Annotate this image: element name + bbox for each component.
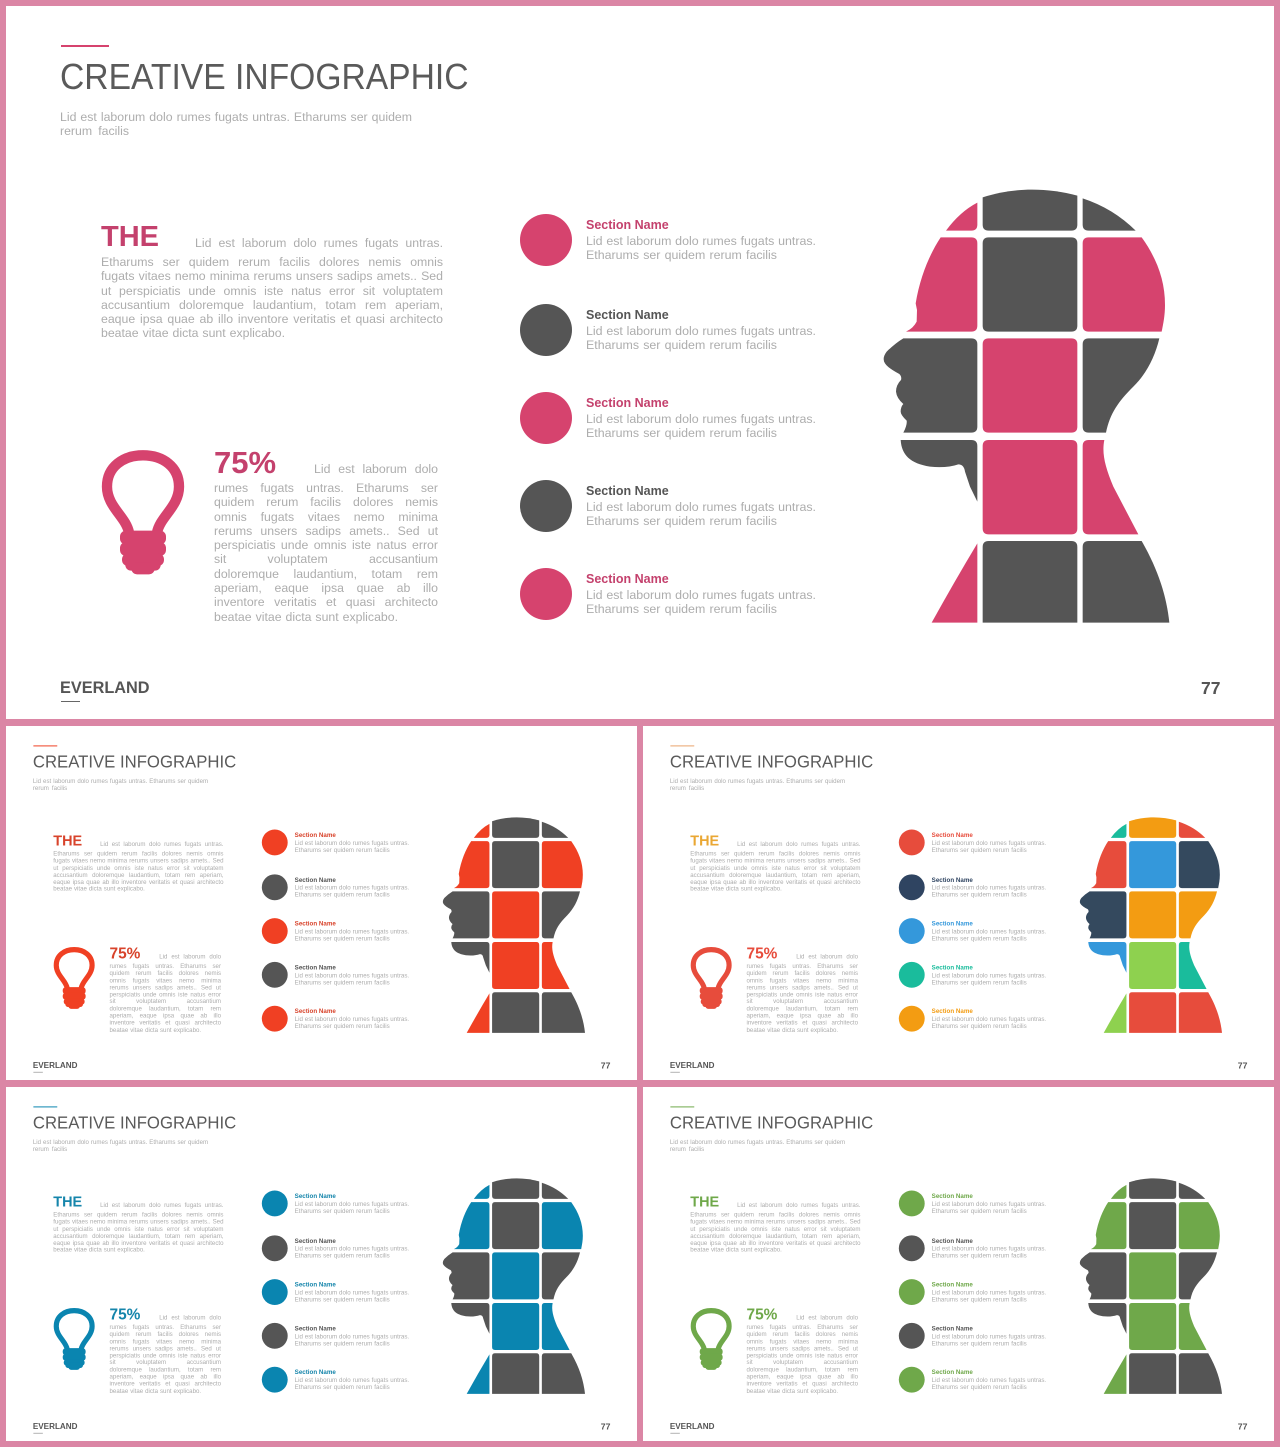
section item 4 [898,962,1046,988]
accent line [61,45,109,47]
text block: 75% paragraph: Lid est laborum dolo [796,1314,858,1321]
section item 5: Etharums ser quidem rerum facilis [295,1384,390,1391]
text block: THE paragraph [690,840,860,892]
section item 3: Lid est laborum dolo rumes fugats untras. [295,928,409,935]
text block: THE paragraph: Etharums ser quidem rerum facilis dolores nemis omnis [690,850,860,857]
section item 2: Lid est laborum dolo rumes fugats untras. [932,884,1046,891]
title: CREATIVE INFOGRAPHIC [33,1112,236,1132]
heading: THE: THE [690,833,719,849]
text block: THE paragraph: Etharums ser quidem rerum facilis dolores nemis omnis [53,1211,223,1218]
text block: THE paragraph: ut perspiciatis unde omnis iste natus error sit voluptatem [690,864,860,871]
footer brand: EVERLAND [670,1422,714,1431]
section item 3 [898,918,1046,944]
text block: 75% paragraph: rumes fugats untras. Etharums ser [214,481,438,495]
text block: 75% paragraph: beatae vitae dicta sunt explicabo. [747,1026,838,1033]
title: CREATIVE INFOGRAPHIC [33,751,236,771]
section item 1: Section Name [295,1193,336,1199]
section item 3: Section Name [295,920,336,927]
icon: light bulb [54,1308,95,1370]
text block: 75% paragraph: sit voluptatem accusantium [110,998,221,1005]
text block: THE paragraph: Lid est laborum dolo rumes fugats untras. [100,1201,223,1208]
text block: THE paragraph: Etharums ser quidem rerum facilis dolores nemis omnis [690,1211,860,1218]
section item 5: Lid est laborum dolo rumes fugats untras. [295,1377,409,1384]
text block: THE paragraph: eaque ipsa quae ab illo inventore veritatis et quasi architecto [690,1239,860,1246]
text block: 75% paragraph: beatae vitae dicta sunt explicabo. [214,610,398,624]
section item 5 [262,1006,409,1032]
section item 1: Etharums ser quidem rerum facilis [932,1207,1027,1214]
section item 3 [262,1279,409,1305]
text block: 75% paragraph: Lid est laborum dolo [159,1314,221,1321]
text block: 75% paragraph: quidem rerum facilis dolores nemis [747,970,858,976]
heading: THE: THE [690,1194,719,1210]
section item 4: Etharums ser quidem rerum facilis [932,1340,1027,1347]
text block: THE paragraph: fugats vitaes nemo minima rerums unsers sadips amets.. Sed [690,1218,860,1225]
section item 1 [898,830,1046,856]
subtitle [670,1139,845,1153]
text block: 75% paragraph: perspiciatis unde omnis iste natus error [214,538,438,552]
section item 4: Lid est laborum dolo rumes fugats untras. [586,500,816,514]
accent line [670,1105,694,1108]
section item 3: Section Name [295,1281,336,1288]
text block: 75% paragraph: rerums unsers sadips amets.. Sed ut [214,524,438,538]
section item 4: Etharums ser quidem rerum facilis [932,979,1027,986]
section item 2: Section Name [295,1237,336,1244]
text block: THE paragraph: Lid est laborum dolo rumes fugats untras. [100,840,223,847]
text block: THE paragraph: ut perspiciatis unde omnis iste natus error sit voluptatem [690,1225,860,1232]
section item 5: Lid est laborum dolo rumes fugats untras. [586,588,816,602]
text block: 75% paragraph: rerums unsers sadips amets.. Sed ut [747,984,858,991]
text block: 75% paragraph: aperiam, eaque ipsa quae ab illo [110,1373,221,1380]
section item 5: Etharums ser quidem rerum facilis [586,602,777,616]
section item 5: Etharums ser quidem rerum facilis [295,1023,390,1030]
text block: 75% paragraph: omnis fugats vitaes nemo minima [747,977,858,984]
heading: 75%: 75% [110,944,140,962]
section item 4: Etharums ser quidem rerum facilis [586,514,777,528]
section item 2: Lid est laborum dolo rumes fugats untras. [295,1245,409,1252]
text block: 75% paragraph: rumes fugats untras. Etharums ser [110,962,221,969]
panel: red slide [6,726,637,1080]
icon: light bulb [690,947,732,1009]
section item 3: Etharums ser quidem rerum facilis [932,935,1027,942]
section item 5: Section Name [295,1008,336,1015]
text block: 75% paragraph: Lid est laborum dolo [159,953,221,960]
section item 2: Lid est laborum dolo rumes fugats untras. [295,884,409,891]
section item 4 [262,1323,421,1355]
head silhouette made of tiles [1073,1174,1227,1398]
section item 2: Etharums ser quidem rerum facilis [295,891,390,898]
icon: light bulb [54,947,95,1009]
text block: 75% paragraph: Lid est laborum dolo [796,953,858,960]
section item 1: Lid est laborum dolo rumes fugats untras. [295,1200,409,1207]
section item 1: Etharums ser quidem rerum facilis [295,846,390,853]
section item 5: Section Name [932,1369,973,1376]
text block: 75% paragraph [110,953,221,1034]
text block: THE paragraph: Etharums ser quidem rerum facilis dolores nemis omnis [53,850,223,857]
text block: THE paragraph [53,1201,224,1253]
text block: 75% paragraph: quidem rerum facilis dolores nemis [110,970,221,976]
text block: 75% paragraph: inventore veritatis et quasi architecto [214,595,438,609]
text block: 75% paragraph: quidem rerum facilis dolores nemis [110,1331,221,1337]
heading: 75%: 75% [747,944,777,962]
section item 3: Section Name [932,1281,973,1288]
text block: 75% paragraph: perspiciatis unde omnis iste natus error [747,1352,858,1359]
text block: 75% paragraph: rumes fugats untras. Etharums ser [747,962,858,969]
text block: 75% paragraph: perspiciatis unde omnis iste natus error [110,991,221,998]
text block: 75% paragraph [214,462,438,624]
page number: 77 [601,1060,610,1070]
panel: green slide [643,1087,1274,1441]
text block: 75% paragraph: sit voluptatem accusantium [747,1359,858,1366]
text block: THE paragraph: fugats vitaes nemo minima rerums unsers sadips amets.. Sed [53,857,223,864]
section item 3: Section Name [932,920,973,927]
panel: blue slide [6,1087,637,1441]
subtitle [670,778,845,792]
text block: 75% paragraph: beatae vitae dicta sunt explicabo. [110,1387,201,1394]
text block: THE paragraph [101,236,443,340]
subtitle: rerum facilis [33,785,67,792]
footer brand: EVERLAND [60,679,150,697]
text block: 75% paragraph: beatae vitae dicta sunt explicabo. [110,1026,201,1033]
subtitle: rerum facilis [33,1146,67,1153]
section item 4: Etharums ser quidem rerum facilis [295,979,390,986]
text block: 75% paragraph: doloremque laudantium, totam rem [747,1005,858,1012]
subtitle: Lid est laborum dolo rumes fugats untras. Etharums ser quidem [670,778,845,785]
text block: 75% paragraph [110,1314,221,1394]
section item 4: Lid est laborum dolo rumes fugats untras. [932,972,1046,979]
heading: 75%: 75% [747,1305,777,1323]
text block: THE paragraph: fugats vitaes nemo minima rerums unsers sadips amets.. Sed [53,1218,223,1225]
text block: 75% paragraph: rerums unsers sadips amets.. Sed ut [110,1345,221,1352]
text block: 75% paragraph: Lid est laborum dolo [314,462,438,476]
text block: THE paragraph: eaque ipsa quae ab illo inventore veritatis et quasi architecto [101,312,443,326]
subtitle: Lid est laborum dolo rumes fugats untras. Etharums ser quidem [33,1139,208,1146]
section item 5: Lid est laborum dolo rumes fugats untras. [295,1016,409,1023]
section item 1 [520,214,816,266]
section item 2: Lid est laborum dolo rumes fugats untras. [586,324,816,338]
panel: main pink slide [6,6,1274,719]
text block: 75% paragraph: doloremque laudantium, totam rem [110,1366,221,1373]
section item 1 [899,1191,1058,1222]
section item 4: Section Name [295,964,336,971]
section item 1: Etharums ser quidem rerum facilis [586,248,777,262]
heading: THE: THE [53,833,82,849]
section item 2: Section Name [932,876,973,883]
head silhouette made of multicoloured tiles [1080,817,1222,1033]
section item 4: Section Name [586,484,669,498]
section item 4: Lid est laborum dolo rumes fugats untras. [932,1333,1046,1340]
section item 5: Etharums ser quidem rerum facilis [932,1384,1027,1391]
text block: 75% paragraph: perspiciatis unde omnis iste natus error [110,1352,221,1359]
text block: 75% paragraph: rerums unsers sadips amets.. Sed ut [110,984,221,991]
text block: THE paragraph: fugats vitaes nemo minima rerums unsers sadips amets.. Sed [101,269,443,283]
section item 4: Etharums ser quidem rerum facilis [295,1340,390,1347]
section item 3: Etharums ser quidem rerum facilis [932,1296,1027,1303]
text block: 75% paragraph: inventore veritatis et quasi architecto [747,1380,858,1387]
text block: 75% paragraph: inventore veritatis et quasi architecto [110,1380,221,1387]
text block: THE paragraph: accusantium doloremque laudantium, totam rem aperiam, [690,1232,860,1239]
section item 5: Section Name [932,1008,973,1015]
section item 1 [262,1190,409,1216]
section item 3 [520,392,816,444]
text block: 75% paragraph: sit voluptatem accusantium [747,998,858,1005]
section item 3: Section Name [586,396,669,410]
section item 5 [262,1367,421,1399]
text block: THE paragraph: Etharums ser quidem rerum facilis dolores nemis omnis [101,255,443,269]
section item 2: Etharums ser quidem rerum facilis [932,891,1027,898]
text block: THE paragraph: beatae vitae dicta sunt explicabo. [53,885,145,892]
section item 1: Etharums ser quidem rerum facilis [932,846,1027,853]
text block: THE paragraph: accusantium doloremque laudantium, totam rem aperiam, [101,298,443,312]
head silhouette made of tiles [884,190,1170,623]
heading: 75%: 75% [110,1305,140,1323]
text block: THE paragraph: beatae vitae dicta sunt explicabo. [690,1246,782,1253]
text block: 75% paragraph: rumes fugats untras. Etharums ser [747,1323,858,1330]
section item 2: Lid est laborum dolo rumes fugats untras. [932,1245,1046,1252]
section item 2: Etharums ser quidem rerum facilis [932,1252,1027,1259]
section item 5 [899,1367,1058,1399]
section item 5: Section Name [586,572,669,586]
section item 1: Section Name [932,1193,973,1199]
text block: 75% paragraph: rerums unsers sadips amets.. Sed ut [747,1345,858,1352]
section item 5 [520,568,816,620]
subtitle: Lid est laborum dolo rumes fugats untras. Etharums ser quidem [60,110,412,124]
section item 1: Section Name [295,832,336,838]
section item 3 [899,1279,1058,1311]
text block: THE paragraph: fugats vitaes nemo minima rerums unsers sadips amets.. Sed [690,857,860,864]
section item 5: Lid est laborum dolo rumes fugats untras. [932,1016,1046,1023]
text block: 75% paragraph: sit voluptatem accusantium [214,552,438,566]
section item 1: Section Name [586,218,669,232]
section item 5: Lid est laborum dolo rumes fugats untras. [932,1377,1046,1384]
text block: 75% paragraph: aperiam, eaque ipsa quae ab illo [747,1012,858,1019]
section item 4 [520,480,816,532]
icon: light bulb [685,1308,735,1378]
section item 4: Lid est laborum dolo rumes fugats untras. [295,972,409,979]
section item 2: Etharums ser quidem rerum facilis [295,1252,390,1259]
section item 2 [899,1235,1058,1267]
title: CREATIVE INFOGRAPHIC [60,56,469,97]
text block: THE paragraph: Lid est laborum dolo rumes fugats untras. [737,1201,860,1208]
section item 4 [262,962,409,988]
subtitle [33,778,208,792]
section item 4: Section Name [932,1325,973,1332]
text block: THE paragraph [690,1201,860,1254]
text block: 75% paragraph: rumes fugats untras. Etharums ser [110,1323,221,1330]
subtitle [33,1139,208,1153]
section item 2 [898,874,1046,900]
text block: 75% paragraph: omnis fugats vitaes nemo minima [214,510,438,524]
text block: 75% paragraph: inventore veritatis et quasi architecto [110,1019,221,1026]
section item 5 [898,1006,1046,1032]
section item 5: Section Name [295,1369,336,1376]
section item 3: Lid est laborum dolo rumes fugats untras. [932,928,1046,935]
text block: 75% paragraph: perspiciatis unde omnis iste natus error [747,991,858,998]
text block: THE paragraph [53,840,224,892]
title: CREATIVE INFOGRAPHIC [670,1112,873,1132]
subtitle: rerum facilis [60,124,129,138]
heading: THE: THE [101,221,159,253]
subtitle: Lid est laborum dolo rumes fugats untras. Etharums ser quidem [670,1139,845,1146]
text block: THE paragraph: eaque ipsa quae ab illo inventore veritatis et quasi architecto [53,1239,223,1246]
title: CREATIVE INFOGRAPHIC [670,751,873,771]
head silhouette made of tiles [442,817,585,1033]
section item 2: Section Name [295,876,336,883]
section item 3: Lid est laborum dolo rumes fugats untras. [586,412,816,426]
section item 5: Etharums ser quidem rerum facilis [932,1023,1027,1030]
section item 1: Section Name [932,832,973,838]
section item 4: Lid est laborum dolo rumes fugats untras. [295,1333,409,1340]
text block: THE paragraph: beatae vitae dicta sunt explicabo. [690,885,782,892]
head silhouette made of tiles [436,1174,590,1398]
text block: 75% paragraph: aperiam, eaque ipsa quae ab illo [747,1373,858,1380]
section item 4 [899,1323,1058,1355]
text block: THE paragraph: eaque ipsa quae ab illo inventore veritatis et quasi architecto [690,878,860,885]
section item 1: Lid est laborum dolo rumes fugats untras. [295,839,409,846]
text block: THE paragraph: accusantium doloremque laudantium, totam rem aperiam, [690,871,860,878]
section item 3: Etharums ser quidem rerum facilis [295,935,390,942]
section item 3: Etharums ser quidem rerum facilis [586,426,777,440]
section item 2 [520,304,816,356]
section item 2: Section Name [932,1237,973,1244]
section item 1: Lid est laborum dolo rumes fugats untras. [932,1200,1046,1207]
text block: THE paragraph: eaque ipsa quae ab illo inventore veritatis et quasi architecto [53,878,223,885]
page number: 77 [1238,1060,1247,1070]
section item 3 [262,918,409,944]
footer brand: EVERLAND [33,1422,77,1431]
section item 2: Etharums ser quidem rerum facilis [586,338,777,352]
accent line [33,744,57,747]
accent line [33,1105,57,1108]
panel: multicolour slide [643,726,1274,1080]
subtitle: rerum facilis [670,785,704,792]
text block: 75% paragraph: aperiam, eaque ipsa quae ab illo [110,1012,221,1019]
section item 4: Section Name [932,964,973,971]
text block: 75% paragraph: omnis fugats vitaes nemo minima [747,1338,858,1345]
section item 2 [262,874,409,900]
page number: 77 [1201,678,1220,698]
text block: 75% paragraph: doloremque laudantium, totam rem [747,1366,858,1373]
section item 1: Lid est laborum dolo rumes fugats untras. [932,839,1046,846]
section item 3: Etharums ser quidem rerum facilis [295,1296,390,1303]
text block: 75% paragraph: omnis fugats vitaes nemo minima [110,977,221,984]
text block: THE paragraph: Lid est laborum dolo rumes fugats untras. [195,236,443,250]
text block: THE paragraph: beatae vitae dicta sunt explicabo. [101,326,285,340]
text block: 75% paragraph [746,953,858,1034]
page number: 77 [601,1421,610,1431]
text block: 75% paragraph: beatae vitae dicta sunt explicabo. [747,1387,838,1394]
heading: 75%: 75% [214,445,276,480]
section item 2: Section Name [586,308,669,322]
text block: THE paragraph: ut perspiciatis unde omnis iste natus error sit voluptatem [53,1225,223,1232]
text block: 75% paragraph: doloremque laudantium, totam rem [214,567,438,581]
subtitle: Lid est laborum dolo rumes fugats untras. Etharums ser quidem [33,778,208,785]
section item 3: Lid est laborum dolo rumes fugats untras. [932,1289,1046,1296]
section item 2 [262,1235,409,1262]
page number: 77 [1238,1421,1247,1431]
icon: light bulb [102,450,184,574]
text block: 75% paragraph: sit voluptatem accusantium [110,1359,221,1366]
text block: THE paragraph: Lid est laborum dolo rumes fugats untras. [737,840,860,847]
text block: 75% paragraph: doloremque laudantium, totam rem [110,1005,221,1012]
subtitle: rerum facilis [670,1146,704,1153]
text block: 75% paragraph: quidem rerum facilis dolores nemis [214,495,438,509]
text block: THE paragraph: accusantium doloremque laudantium, totam rem aperiam, [53,1232,223,1239]
section item 4: Section Name [295,1325,336,1332]
text block: THE paragraph: beatae vitae dicta sunt explicabo. [53,1246,145,1253]
text block: 75% paragraph: aperiam, eaque ipsa quae ab illo [214,581,438,595]
section item 1 [262,830,409,856]
text block: 75% paragraph: omnis fugats vitaes nemo minima [110,1338,221,1345]
text block: THE paragraph: ut perspiciatis unde omnis iste natus error sit voluptatem [101,284,443,298]
subtitle [60,110,412,138]
heading: THE: THE [53,1194,82,1210]
accent line [670,744,694,747]
footer brand: EVERLAND [33,1061,77,1070]
text block: 75% paragraph: inventore veritatis et quasi architecto [747,1019,858,1026]
text block: THE paragraph: accusantium doloremque laudantium, totam rem aperiam, [53,871,223,878]
text block: 75% paragraph: quidem rerum facilis dolores nemis [747,1331,858,1337]
section item 3: Lid est laborum dolo rumes fugats untras. [295,1289,409,1296]
footer brand: EVERLAND [670,1061,714,1070]
text block: 75% paragraph [747,1314,858,1395]
text block: THE paragraph: ut perspiciatis unde omnis iste natus error sit voluptatem [53,864,223,871]
section item 1: Etharums ser quidem rerum facilis [295,1207,390,1214]
section item 1: Lid est laborum dolo rumes fugats untras. [586,234,816,248]
